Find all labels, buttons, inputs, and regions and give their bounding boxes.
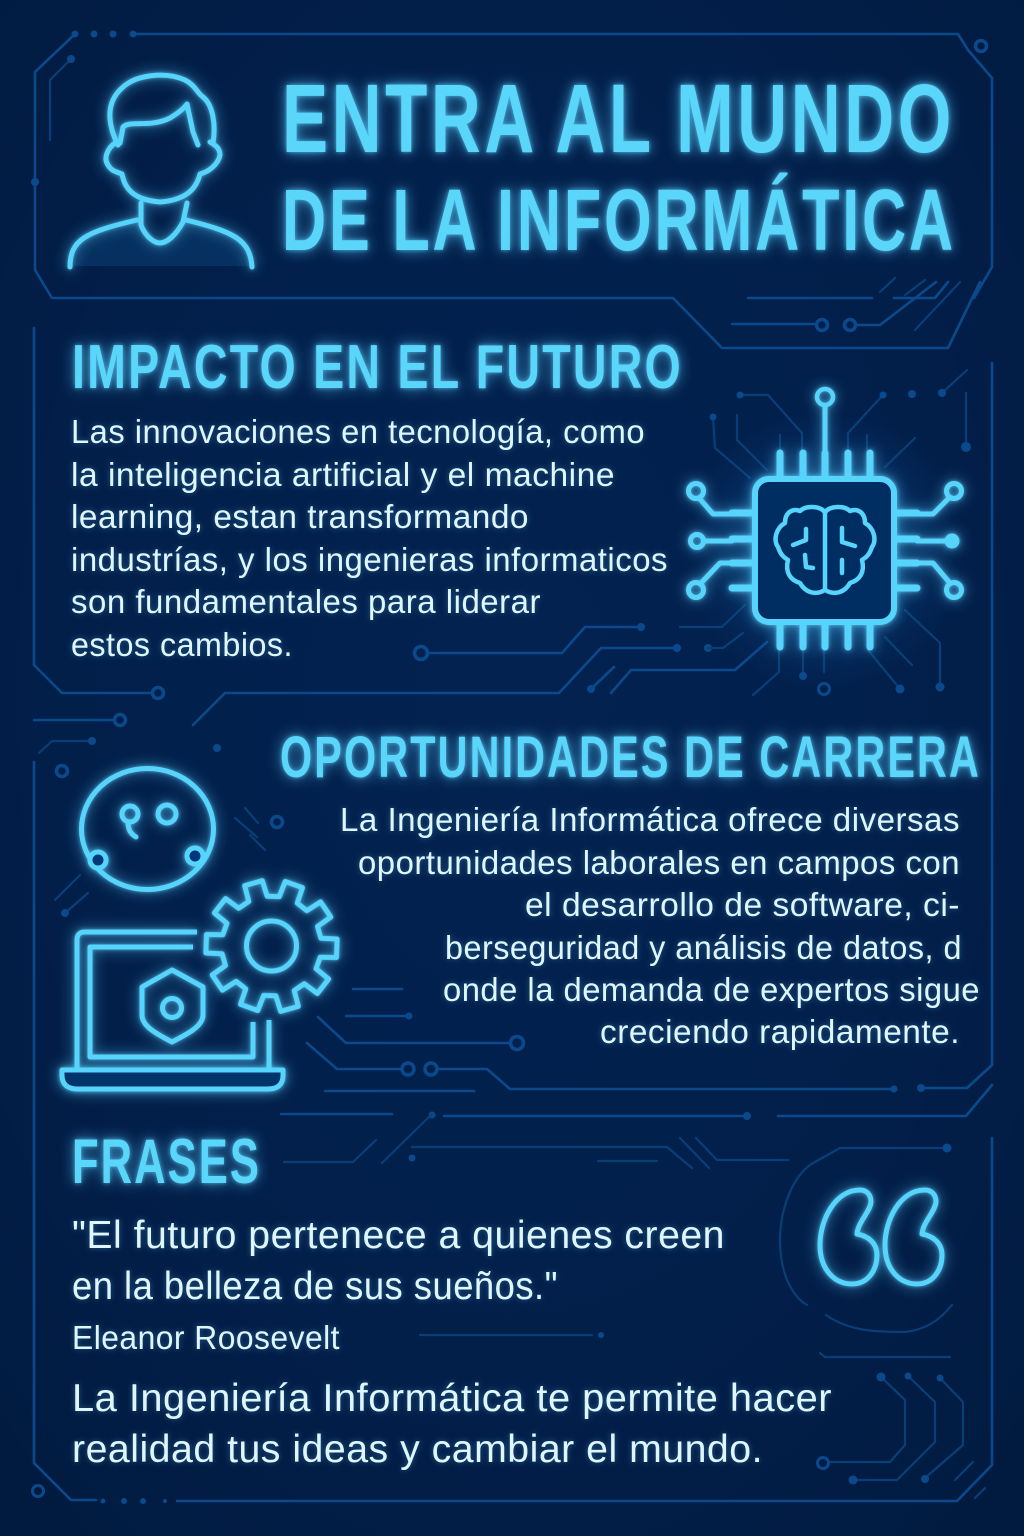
icon: gear: [204, 879, 339, 1013]
text block: closing message: realidad tus ideas y cambiar el mundo.: [72, 1428, 763, 1471]
text block: oportunidades: La Ingeniería Informática ofrece diversas: [340, 801, 960, 838]
icon: quotation marks: [820, 1190, 942, 1284]
icon: AI brain chip: [684, 389, 964, 690]
text block: impacto: estos cambios.: [71, 626, 293, 663]
text block: oportunidades: creciendo rapidamente.: [600, 1013, 960, 1050]
text block: oportunidades: onde la demanda de expertos sigue: [443, 971, 980, 1008]
text block: oportunidades: oportunidades laborales en campos con: [358, 844, 960, 881]
text block: impacto: Las innovaciones en tecnología, como: [71, 413, 645, 450]
text block: quote: en la belleza de sus sueños.": [72, 1265, 558, 1308]
text block: author: Eleanor Roosevelt: [72, 1319, 340, 1356]
heading: impacto en el futuro: IMPACTO EN EL FUTURO: [72, 333, 683, 402]
text block: oportunidades: [340, 801, 980, 1050]
text block: impacto: la inteligencia artificial y el machine: [71, 456, 615, 493]
title: [282, 64, 956, 269]
text block: oportunidades: el desarrollo de software, ci-: [525, 886, 960, 923]
text block: quote: [72, 1214, 725, 1308]
text block: closing message: [72, 1377, 832, 1471]
text block: closing message: La Ingeniería Informática te permite hacer: [72, 1377, 832, 1420]
heading: frases: FRASES: [72, 1127, 261, 1197]
text block: impacto: son fundamentales para liderar: [71, 583, 541, 620]
icon: robot face: [82, 768, 214, 890]
text block: quote: "El futuro pertenece a quienes creen: [72, 1214, 725, 1257]
icon: laptop with shield: [62, 932, 283, 1089]
text block: impacto: industrías, y los ingenieras informaticos: [71, 541, 668, 578]
text block: oportunidades: berseguridad y análisis de datos, d: [445, 929, 962, 966]
icon: person: [70, 75, 252, 267]
text block: impacto: [71, 413, 668, 663]
text block: impacto: learning, estan transformando: [71, 498, 529, 535]
